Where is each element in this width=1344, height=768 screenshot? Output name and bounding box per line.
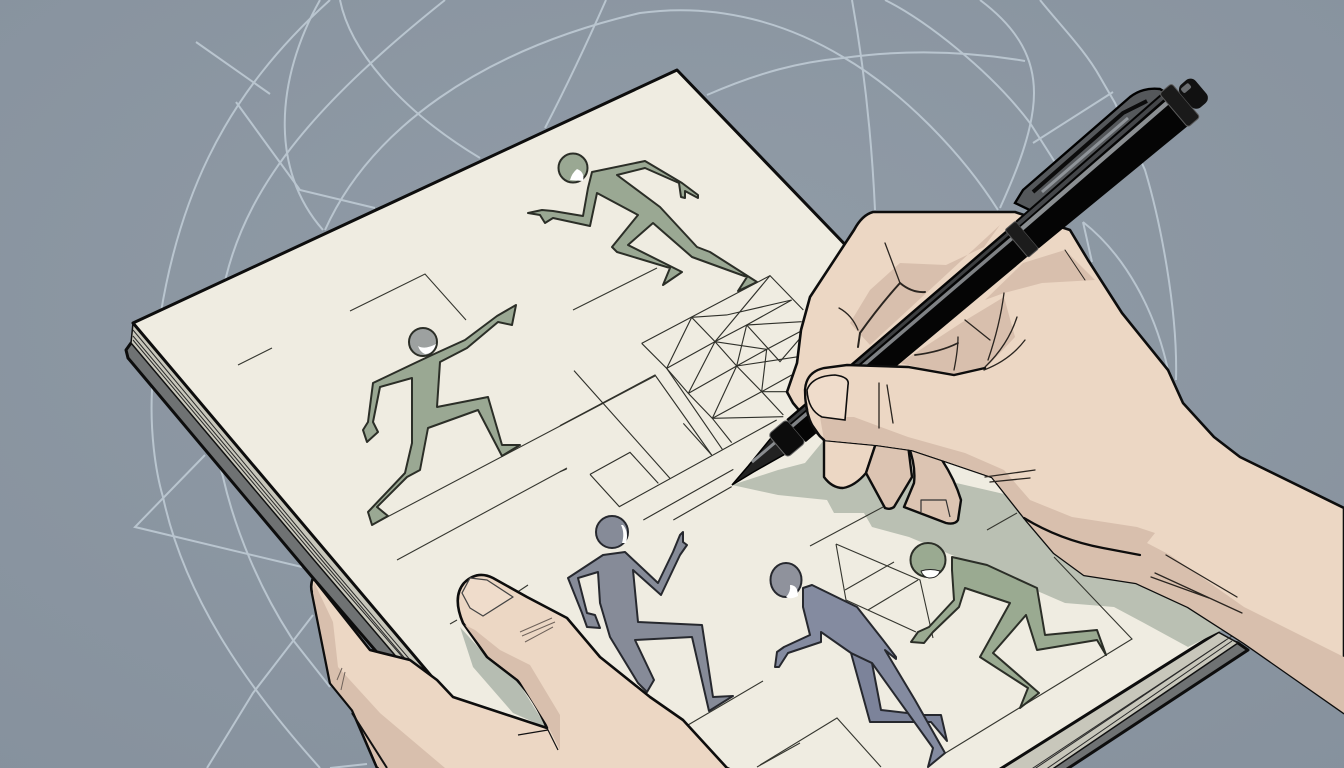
shadow under thumb bbox=[460, 627, 547, 728]
pen collar bbox=[768, 419, 806, 458]
pen cap collar bbox=[1159, 83, 1200, 127]
pen barrel bbox=[1014, 93, 1189, 251]
writing hand bbox=[718, 70, 1344, 713]
thumb overlay bbox=[805, 365, 1110, 518]
notebook page edges bbox=[131, 323, 1238, 768]
thumb nail bbox=[462, 578, 513, 616]
back leg bbox=[851, 653, 947, 741]
figure: green runner at top bbox=[528, 154, 757, 291]
pen ring bbox=[1005, 221, 1039, 257]
cast shadow of writing hand on page bbox=[732, 440, 1222, 647]
lower finger and crease lines bbox=[337, 618, 558, 768]
pen bbox=[718, 70, 1215, 502]
figure: green figure crouching bbox=[910, 543, 1106, 708]
thin sketched lines on page bbox=[238, 268, 1132, 767]
figure: blue figure stooping bbox=[770, 563, 947, 767]
torso and front leg bbox=[775, 585, 945, 767]
web of hand bbox=[900, 297, 1015, 375]
geometric lattice and rectangles sketch bbox=[560, 276, 803, 520]
notebook top page bbox=[133, 70, 1218, 768]
pen body bbox=[785, 229, 1029, 444]
background geometric construction lines bbox=[135, 0, 1176, 768]
shade under thumb and wrist bbox=[820, 417, 1344, 713]
palm shading bbox=[313, 582, 445, 768]
thumb outline and nail bbox=[805, 365, 985, 440]
fingers beneath pen bbox=[824, 430, 961, 524]
figure: green figure pointing up bbox=[363, 305, 520, 525]
pen button bbox=[1176, 76, 1211, 112]
hand crease lines bbox=[839, 243, 1242, 613]
notebook back cover bbox=[126, 343, 1248, 768]
notebook bbox=[126, 70, 1248, 768]
thumb shading bbox=[465, 625, 560, 750]
figure: blue figure pointing up bbox=[568, 516, 733, 711]
pen nib bbox=[725, 437, 786, 493]
palm and thumb bbox=[311, 575, 800, 768]
pen clip bbox=[1015, 89, 1178, 215]
shading above index finger bbox=[850, 225, 1000, 345]
holding hand at bottom left bbox=[311, 575, 800, 768]
shading behind pen bbox=[985, 250, 1095, 300]
hand back bbox=[787, 212, 1344, 713]
